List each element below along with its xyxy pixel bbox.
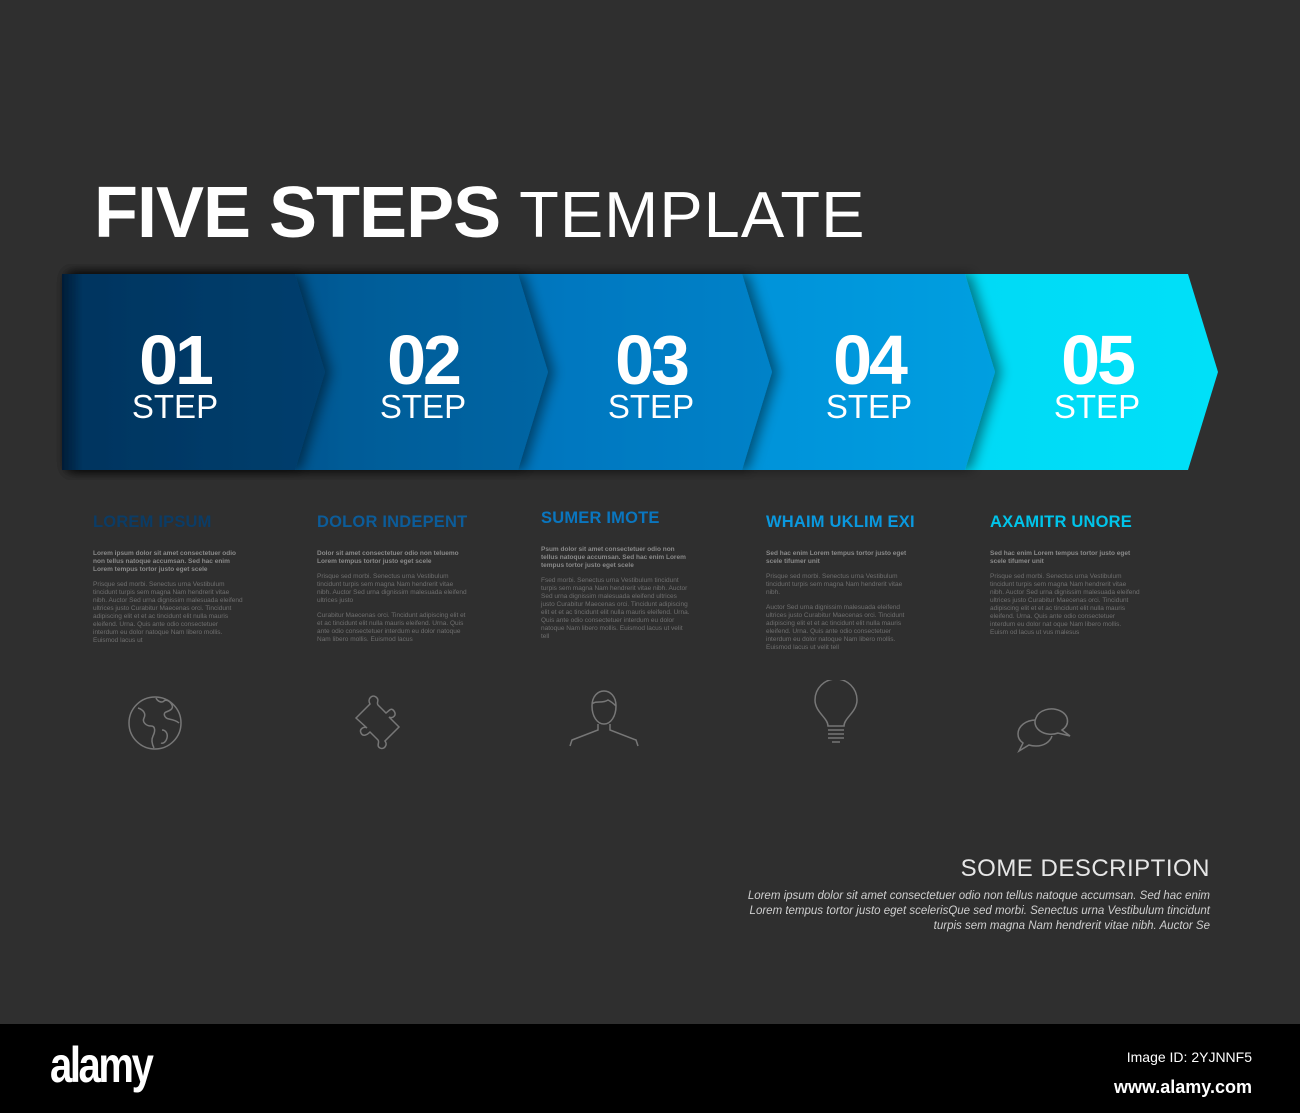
step 1 arrow — [62, 274, 325, 470]
column 3 text: Psum dolor sit amet consectetuer odio non tellus natoque accumsan. Sed hac enim Lorem tempus tortor justo eget scele — [541, 546, 686, 569]
step 4 arrow: STEP — [826, 388, 912, 425]
step 1 arrow: 01 — [139, 321, 212, 399]
step 3 arrow: STEP — [608, 388, 694, 425]
step 3 arrow: 03 — [615, 321, 688, 399]
column 5 text — [990, 513, 1140, 636]
column 1 text: Lorem ipsum dolor sit amet consectetuer odio non tellus natoque accumsan. Sed hac enim Lorem tempus tortor justo eget scele — [93, 550, 236, 573]
column 4 text: WHAIM UKLIM EXI — [766, 513, 915, 531]
step 5 arrow — [62, 274, 1218, 470]
icon: light bulb — [814, 680, 858, 743]
step 2 arrow — [62, 274, 548, 470]
column 2 text — [317, 513, 467, 643]
description block: turpis sem magna Nam hendrerit vitae nibh. Auctor Se — [934, 920, 1210, 932]
column 1 text: LOREM IPSUM — [93, 513, 212, 531]
description block: Lorem ipsum dolor sit amet consectetuer odio non tellus natoque accumsan. Sed hac enim — [748, 890, 1210, 902]
column 4 text: Prisque sed morbi. Senectus urna Vestibulum tincidunt turpis sem magna Nam hendrerit vitae nibh. — [766, 573, 902, 596]
title: FIVE STEPS TEMPLATE — [94, 173, 865, 253]
footer info: Image ID: 2YJNNF5 — [1127, 1049, 1252, 1065]
icon: person — [569, 690, 639, 746]
description block: SOME DESCRIPTION — [961, 855, 1210, 882]
column 2 text: Dolor sit amet consectetuer odio non teluemo Lorem tempus tortor justo eget scele — [317, 550, 459, 565]
step 5 arrow: STEP — [1054, 388, 1140, 425]
footer info — [1114, 1049, 1252, 1097]
step 4 arrow: 04 — [833, 321, 908, 399]
description block: Lorem tempus tortor justo eget scelerisQue sed morbi. Senectus urna Vestibulum tincidunt — [750, 905, 1210, 917]
column 5 text: Prisque sed morbi. Senectus urna Vestibulum tincidunt turpis sem magna Nam hendrerit vitae nibh. Auctor Sed urna dignissim malesuada eleifend ultrices justo Curabitur Maecenas orci. Tincidunt adipiscing elit et et ac tincidunt elit nulla mauris eleifend. Urna. Quis ante odio consectetuer interdum eu dolor nat oque Nam libero mollis. Euism od lacus ut vus malesus — [990, 573, 1140, 636]
column 5 text: Sed hac enim Lorem tempus tortor justo eget scele tifumer unit — [990, 550, 1130, 565]
description block — [748, 855, 1210, 932]
column 5 text: AXAMITR UNORE — [990, 513, 1132, 531]
icon: speech bubbles — [1017, 708, 1070, 753]
step 2 arrow: STEP — [380, 388, 466, 425]
footer band — [0, 1024, 1300, 1113]
column 1 text — [93, 513, 243, 644]
column 3 text — [540, 509, 690, 640]
step 1 arrow: STEP — [132, 388, 218, 425]
column 3 text: Fsed morbi. Senectus urna Vestibulum tincidunt turpis sem magna Nam hendrerit vitae nibh. Auctor Sed urna dignissim malesuada eleifend ultrices justo Curabitur Maecenas orci. Tincidunt adipiscing elit et et ac tincidunt elit nulla mauris eleifend. Urna. Quis ante odio consectetuer interdum eu dolor natoque Nam libero mollis. Euismod lacus ut velit tell — [541, 577, 690, 640]
column 2 text: Prisque sed morbi. Senectus urna Vestibulum tincidunt turpis sem magna Nam hendrerit vitae nibh. Auctor Sed urna dignissim malesuada eleifend ultrices justo — [317, 573, 467, 604]
arrow band: five steps — [61, 267, 1218, 477]
icon: globe — [128, 696, 182, 750]
icon: puzzle — [355, 695, 400, 750]
column 4 text: Auctor Sed urna dignissim malesuada eleifend ultrices justo Curabitur Maecenas orci. Tincidunt adipiscing elit et et ac tincidunt elit nulla mauris eleifend. Urna. Quis ante odio consectetuer interdum eu dolor natoque Nam libero mollis. Euismod lacus ut velit tell — [766, 604, 904, 651]
column 4 text — [766, 513, 915, 651]
step 2 arrow: 02 — [387, 321, 460, 399]
step 5 arrow: 05 — [1061, 321, 1134, 399]
column 1 text: Prisque sed morbi. Senectus urna Vestibulum tincidunt turpis sem magna Nam hendrerit vitae nibh. Auctor Sed urna dignissim malesuada eleifend ultrices justo Curabitur Maecenas orci. Tincidunt adipiscing elit et et ac tincidunt elit nulla mauris eleifend. Urna. Quis ante odio consectetuer interdum eu dolor natoque Nam libero mollis. Euismod lacus ut — [93, 581, 243, 644]
column 2 text: Curabitur Maecenas orci. Tincidunt adipiscing elit et et ac tincidunt elit nulla mauris eleifend. Urna. Quis ante odio consectetuer interdum eu dolor natoque Nam libero mollis. Euismod lacus — [317, 612, 466, 643]
column 4 text: Sed hac enim Lorem tempus tortor justo eget scele tifumer unit — [766, 550, 906, 565]
step 4 arrow — [62, 274, 995, 470]
column 3 text: SUMER IMOTE — [541, 509, 660, 527]
step 3 arrow — [62, 274, 772, 470]
footer logo: alamy — [50, 1037, 151, 1093]
footer info: www.alamy.com — [1114, 1077, 1252, 1097]
column 2 text: DOLOR INDEPENT — [317, 513, 467, 531]
